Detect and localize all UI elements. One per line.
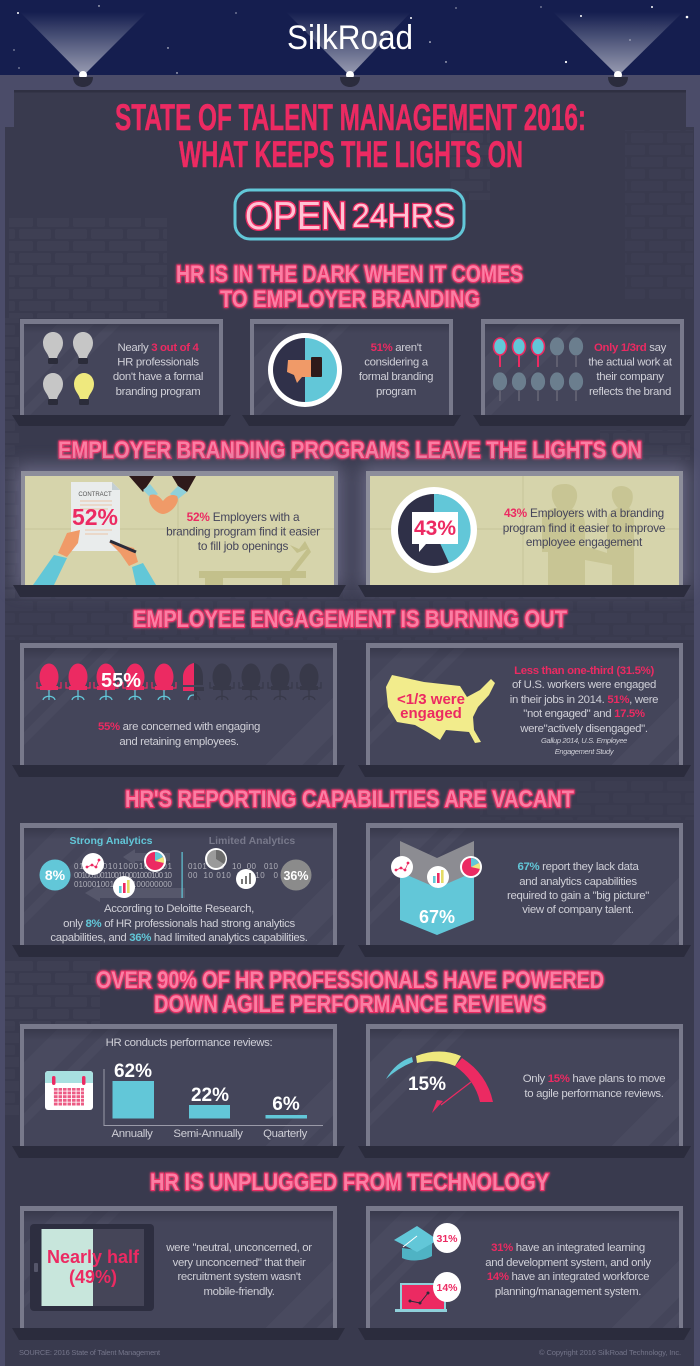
text: branding program (116, 386, 200, 398)
text: their company (596, 371, 664, 383)
icon: mirrors (494, 338, 582, 401)
text: and retaining employees. (119, 736, 239, 748)
text: Gallup 2014, U.S. Employee (541, 736, 627, 745)
text (98, 721, 260, 748)
title (115, 97, 586, 175)
footer: copyright: © Copyright 2016 SilkRoad Technology, Inc. (539, 1348, 681, 1357)
panel: 43% (358, 465, 691, 597)
limited analytics: 36% (283, 869, 309, 883)
text: "not engaged" and 17.5% (523, 708, 645, 720)
text: and analytics capabilities (519, 876, 637, 888)
panel: only 1/3rd (473, 319, 692, 426)
panel: 3 out of 4 (12, 319, 231, 426)
bar chart: 6% (272, 1094, 300, 1115)
panel: 15% gauge (358, 1024, 691, 1158)
panel: nearly half (12, 1206, 345, 1340)
spotlight lamps (73, 71, 628, 87)
text: in their jobs in 2014. 51%, were (510, 694, 658, 706)
heading: agile performance reviews (96, 967, 604, 1018)
text: formal branding (359, 371, 433, 383)
text (166, 510, 320, 553)
icon: laptop (395, 1272, 461, 1312)
icon: ribbon: 67% (419, 907, 455, 927)
map: United States (386, 675, 495, 743)
panel: 67% (358, 823, 691, 957)
gauge (386, 1052, 493, 1113)
text: to fill job openings (198, 539, 289, 553)
text (165, 1242, 312, 1298)
panel: 52% (13, 465, 346, 597)
text: Only 15% have plans to move (523, 1073, 665, 1085)
icon: graduation cap (394, 1223, 461, 1260)
bar chart: 22% (191, 1085, 229, 1106)
text: HR conducts performance reviews: (106, 1037, 273, 1049)
text: of U.S. workers were engaged (512, 679, 656, 691)
text: were"actively disengaged". (519, 723, 648, 735)
limited analytics: 00 10 010 00 10 0 (188, 871, 279, 880)
limited analytics: 0101 10 10 00 010 (188, 862, 279, 871)
text: mobile-friendly. (203, 1286, 275, 1298)
text: 31% have an integrated learning (491, 1242, 645, 1254)
arrows (85, 849, 185, 902)
heading: employer branding (176, 261, 523, 313)
desk and lamp silhouette (199, 541, 311, 585)
text: 43% Employers with a branding (504, 506, 664, 520)
strong analytics: 8% (45, 867, 66, 883)
strong analytics (40, 835, 173, 898)
text: program find it easier to improve (503, 521, 666, 535)
bar chart: Semi-Annually (173, 1128, 243, 1140)
panel: performance reviews chart (12, 1024, 345, 1158)
bar chart: 62% (114, 1061, 152, 1082)
text: employee engagement (526, 535, 643, 549)
strong analytics: 0100010010010100000000 (74, 880, 173, 889)
heading: reporting capabilities: HR'S REPORTING CAPABILITIES ARE VACANT (125, 786, 574, 813)
icon: contract: CONTRACT (78, 492, 112, 498)
icon: calendar (45, 1071, 93, 1110)
heading: employer branding: HR IS IN THE DARK WHEN IT COMES (176, 261, 523, 288)
text: view of company talent. (522, 904, 634, 916)
bar chart: Quarterly (263, 1128, 308, 1140)
text (359, 342, 433, 398)
icon: tablet: (49%) (69, 1267, 117, 1287)
map: United States: engaged (400, 705, 462, 722)
text: 55% are concerned with engaging (98, 721, 260, 733)
text (510, 665, 658, 756)
limited analytics: Limited Analytics (209, 835, 295, 847)
text (485, 1242, 651, 1298)
strong analytics: 001001001100110001000100 10 (74, 871, 173, 880)
bar chart (104, 1061, 323, 1140)
icon: graduation cap: 31% (436, 1233, 458, 1245)
icon: light bulbs (43, 332, 94, 405)
strong analytics: Strong Analytics (69, 835, 153, 847)
text (50, 903, 308, 944)
night sky (0, 0, 700, 76)
panel: 51% (242, 319, 461, 426)
text: HR professionals (117, 356, 199, 368)
text: Only 1/3rd say (594, 342, 667, 354)
text (113, 342, 203, 398)
icon: ribbon (391, 841, 482, 935)
strong analytics: 01 10101010001000 01 (74, 862, 173, 871)
silhouette: two people shaking hands (542, 484, 634, 585)
limited analytics (188, 835, 312, 890)
text: planning/management system. (495, 1286, 641, 1298)
text: reflects the brand (589, 386, 671, 398)
map: United States: <1/3 were (397, 691, 465, 708)
icon: chairs: 55% (101, 670, 141, 692)
text: the actual work at (588, 356, 673, 368)
text: program (376, 386, 416, 398)
neon sign: open 24hrs: 24HRS (352, 197, 455, 234)
panel: strong vs limited analytics (12, 823, 345, 957)
text: branding program find it easier (166, 524, 320, 538)
logo: SilkRoad: SilkRoad (287, 19, 413, 57)
heading: employee engagement: EMPLOYEE ENGAGEMENT IS BURNING OUT (133, 606, 567, 633)
text (507, 861, 649, 916)
text (523, 1073, 665, 1100)
text: and development system, and only (485, 1257, 651, 1269)
heading: unplugged from technology: HR IS UNPLUGGED FROM TECHNOLOGY (150, 1169, 549, 1196)
panel: 31% and 14% (358, 1206, 691, 1340)
text: 52% Employers with a (187, 510, 300, 524)
text: considering a (364, 356, 429, 368)
text: were "neutral, unconcerned, or (165, 1242, 312, 1254)
text: capabilities, and 36% had limited analytics capabilities. (50, 932, 308, 944)
text: only 8% of HR professionals had strong analytics (63, 918, 295, 930)
gauge: 15% (408, 1074, 446, 1095)
text: Less than one-third (31.5%) (514, 665, 654, 677)
icon: thumbs down circle (268, 333, 342, 407)
text: don't have a formal (113, 371, 203, 383)
spotlight beams (20, 12, 683, 73)
stars (13, 5, 688, 74)
icon: handshake (129, 476, 196, 514)
pie chart 43% (391, 487, 477, 573)
text: According to Deloitte Research, (104, 903, 254, 915)
text: recruitment system wasn't (177, 1271, 302, 1283)
text: 51% aren't (371, 342, 423, 354)
pie chart 43%: 43% (414, 517, 456, 540)
text: very unconcerned" that their (173, 1257, 306, 1269)
icon: hands signing (33, 530, 156, 585)
icon: laptop: 14% (436, 1282, 458, 1294)
text: to agile performance reviews. (524, 1088, 664, 1100)
bar chart: Annually (111, 1128, 153, 1140)
text: 67% report they lack data (518, 861, 639, 873)
text: Engagement Study (555, 747, 615, 756)
text: 14% have an integrated workforce (487, 1271, 649, 1283)
neon sign: open 24hrs (235, 190, 464, 239)
heading: agile performance reviews: DOWN AGILE PERFORMANCE REVIEWS (154, 991, 546, 1018)
heading: employer branding: TO EMPLOYER BRANDING (220, 286, 480, 313)
icon: chairs (37, 663, 321, 700)
text: required to gain a "big picture" (507, 890, 649, 902)
text (588, 342, 673, 398)
icon: contract (71, 482, 120, 551)
panel: 55% (12, 643, 345, 777)
icon: contract: 52% (72, 504, 118, 530)
heading: agile performance reviews: OVER 90% OF HR PROFESSIONALS HAVE POWERED (96, 967, 604, 994)
text: Nearly 3 out of 4 (117, 342, 200, 354)
panel: less than one-third (358, 643, 691, 777)
footer: source: SOURCE: 2016 State of Talent Management (19, 1348, 161, 1357)
icon: tablet: Nearly half (47, 1247, 140, 1267)
text (503, 506, 666, 549)
neon sign: open 24hrs: OPEN (245, 195, 347, 238)
icon: tablet (30, 1224, 154, 1311)
